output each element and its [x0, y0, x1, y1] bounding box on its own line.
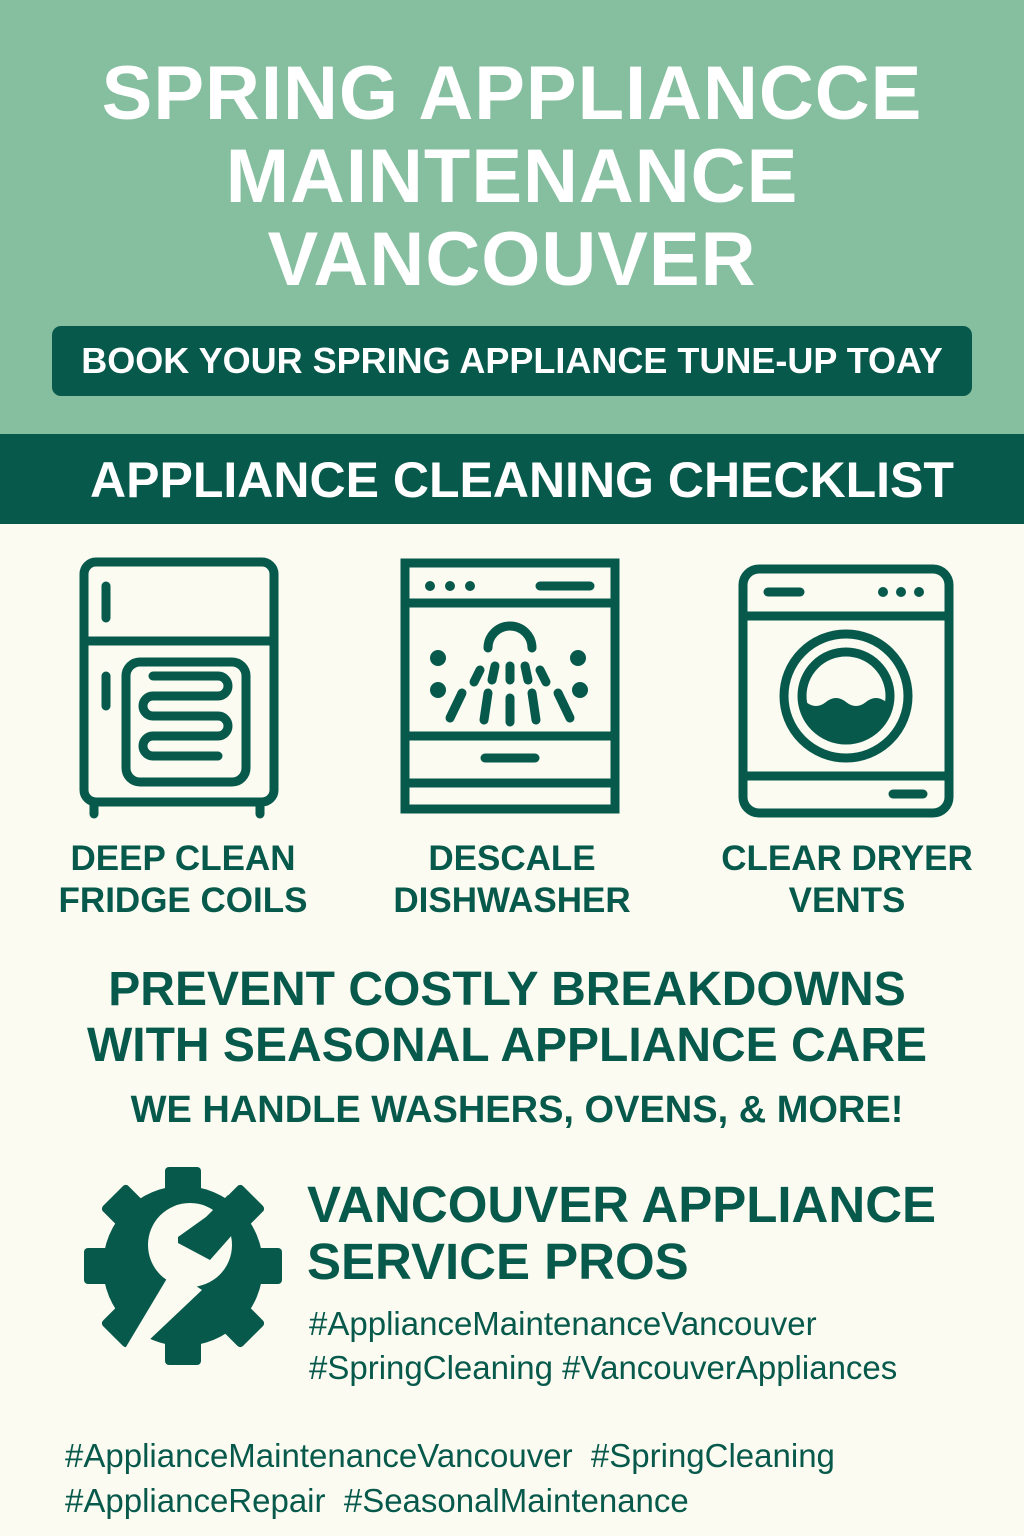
title: MAINTENANCE [226, 134, 798, 219]
title: VANCOUVER [268, 217, 756, 302]
label: dishwasher: DESCALE [428, 839, 596, 878]
label: dryer vents [721, 839, 973, 920]
label: fridge coils [59, 839, 307, 920]
label: dishwasher: DISHWASHER [393, 881, 631, 920]
label: dishwasher [393, 839, 631, 920]
company name [307, 1176, 936, 1290]
checklist heading band [0, 434, 1024, 524]
icon: gear with wrench [84, 1167, 282, 1365]
label: fridge coils: FRIDGE COILS [59, 881, 307, 920]
icon: washer/dryer [738, 564, 954, 818]
checklist heading band: APPLIANCE CLEANING CHECKLIST [90, 452, 954, 508]
icon: fridge [80, 558, 278, 818]
title [102, 51, 922, 302]
hashtags near logo [309, 1305, 897, 1386]
label: dryer vents: VENTS [789, 881, 905, 920]
button: book tune-up: BOOK YOUR SPRING APPLIANCE TUNE-UP TOAY [81, 340, 943, 381]
label: dryer vents: CLEAR DRYER [721, 839, 973, 878]
bottom hashtags: #ApplianceMaintenanceVancouver #SpringCleaning #ApplianceRepair #SeasonalMaintenance [65, 1437, 835, 1519]
hashtags near logo: #SpringCleaning #VancouverAppliances [309, 1349, 897, 1386]
icon: dishwasher [400, 558, 620, 814]
button: book tune-up [52, 326, 972, 396]
header panel [0, 0, 1024, 434]
headline: prevent breakdowns [87, 963, 927, 1072]
company name: SERVICE PROS [307, 1233, 689, 1290]
title: SPRING APPLIANCCE [102, 51, 922, 136]
headline: prevent breakdowns: WITH SEASONAL APPLIANCE CARE [87, 1019, 927, 1072]
hashtags near logo: #ApplianceMaintenanceVancouver [309, 1305, 817, 1342]
headline: prevent breakdowns: PREVENT COSTLY BREAKDOWNS [108, 963, 906, 1016]
label: fridge coils: DEEP CLEAN [71, 839, 295, 878]
company name: VANCOUVER APPLIANCE [307, 1176, 936, 1233]
subline: WE HANDLE WASHERS, OVENS, & MORE! [131, 1089, 903, 1131]
